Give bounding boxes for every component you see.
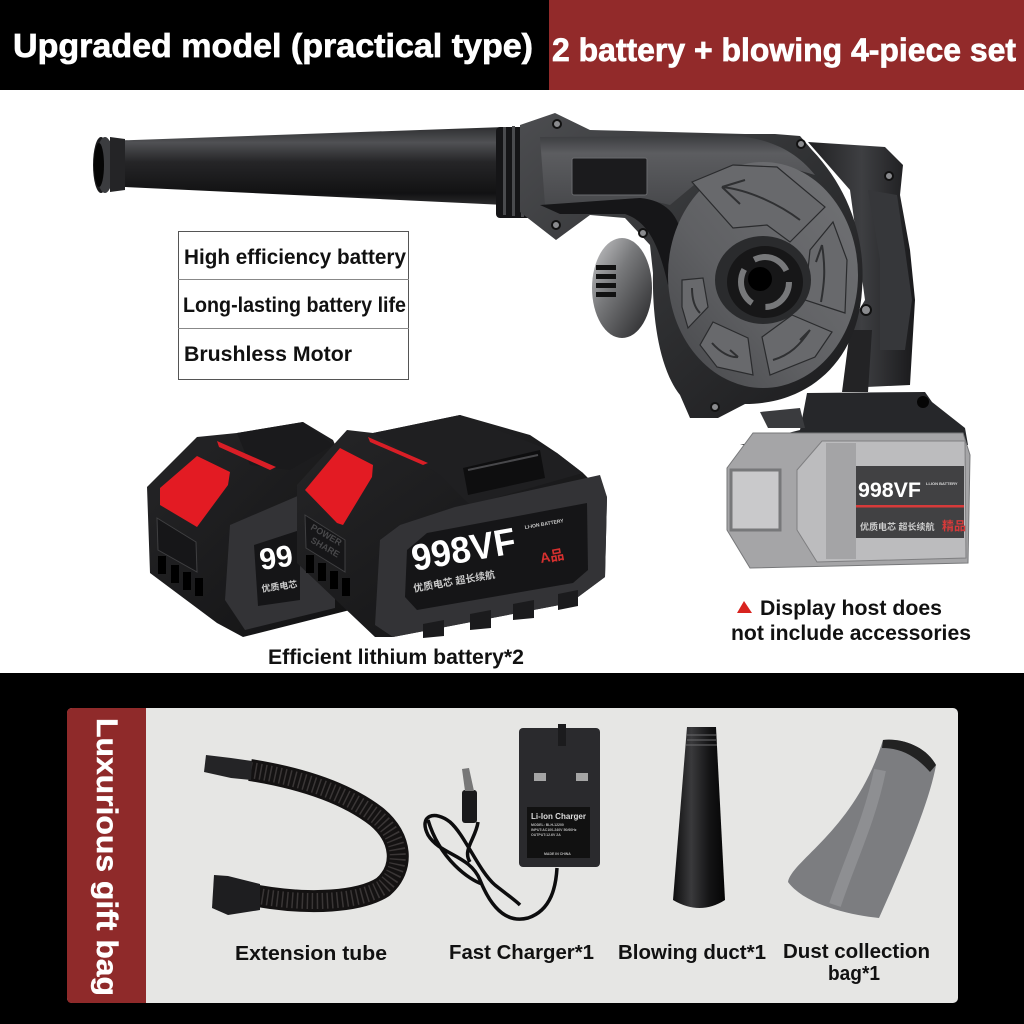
header banner (0, 0, 1024, 90)
accessory: dust collection bag (788, 740, 936, 918)
panel: gift bag accessories (67, 708, 958, 1003)
battery label panel: 精品 (942, 518, 966, 533)
back battery: 99 (257, 540, 295, 577)
back battery (147, 422, 360, 637)
charger label: INPUT:AC100-240V 50/60Hz (531, 828, 577, 832)
battery label panel (856, 466, 966, 538)
header right: set description: 2 battery + blowing 4-piece set (552, 32, 1016, 68)
charger label: MADE IN CHINA (544, 852, 571, 856)
front label panel: 998VF (408, 520, 519, 579)
power share plate: POWER (309, 522, 344, 548)
blower body and neck (520, 113, 893, 418)
feature: motor: Brushless Motor (184, 343, 352, 366)
charger label: Li-Ion Charger (531, 811, 587, 821)
header left: title (0, 0, 549, 90)
blower nozzle tube (93, 126, 544, 218)
footer black band (0, 673, 1024, 1024)
front battery (297, 415, 607, 638)
charger label: MODEL: BLH-12200 (531, 823, 564, 827)
front label panel (405, 503, 588, 610)
battery label panel: 优质电芯 超长续航 (860, 521, 935, 532)
caption: batteries: Efficient lithium battery*2 (268, 646, 524, 669)
airflow arrows (692, 180, 824, 360)
product image: two lithium batteries (147, 415, 607, 638)
notice: display host: not include accessories (731, 622, 971, 645)
accessory: blowing duct (673, 727, 725, 908)
battery label panel: LI-ION BATTERY (926, 481, 958, 486)
power share plate (305, 515, 345, 572)
grey attached battery (727, 433, 970, 568)
front label panel: 优质电芯 超长续航 (412, 568, 496, 595)
charger cable (425, 816, 557, 919)
cover panel outlines (682, 165, 847, 375)
header left: title: Upgraded model (practical type) (13, 27, 533, 64)
display window (572, 158, 647, 195)
label: dust collection bag: Dust collection (783, 941, 930, 963)
charger label: OUTPUT:12.6V 2A (531, 833, 561, 837)
battery label panel: 998VF (858, 479, 921, 502)
gift bag side tab: Luxurious gift bag (90, 718, 123, 996)
handle grip (808, 142, 915, 392)
air intake hub (715, 236, 811, 324)
blower battery mount (740, 392, 968, 445)
label: dust collection bag (783, 941, 930, 985)
label: dust collection bag: bag*1 (828, 963, 880, 985)
product image: cordless blower (93, 113, 970, 568)
label: extension tube: Extension tube (235, 943, 387, 965)
label: blowing duct: Blowing duct*1 (618, 942, 766, 964)
feature list table (178, 232, 409, 380)
fan cover face (668, 162, 858, 388)
notice: display host (731, 597, 971, 645)
feature: battery efficiency: High efficiency battery (184, 246, 406, 269)
feature: battery life: Long-lasting battery life (183, 294, 406, 317)
red bar (368, 437, 428, 465)
gift bag side tab (67, 708, 146, 1003)
motor housing behind (592, 238, 652, 338)
screws (552, 120, 893, 411)
power share plate: SHARE (309, 535, 341, 559)
accessory: fast charger (425, 724, 600, 919)
red latch (305, 448, 373, 525)
front label panel: A品 (539, 546, 565, 566)
header right: set description (549, 0, 1024, 90)
icon: red warning triangle (737, 601, 752, 613)
notice: display host: Display host does (760, 597, 942, 620)
label: fast charger: Fast Charger*1 (449, 942, 594, 964)
back battery: 优质电芯 (261, 578, 298, 594)
charger label (527, 807, 590, 858)
accessory: extension tube (204, 755, 398, 915)
front label panel: LI-ION BATTERY (524, 518, 565, 531)
